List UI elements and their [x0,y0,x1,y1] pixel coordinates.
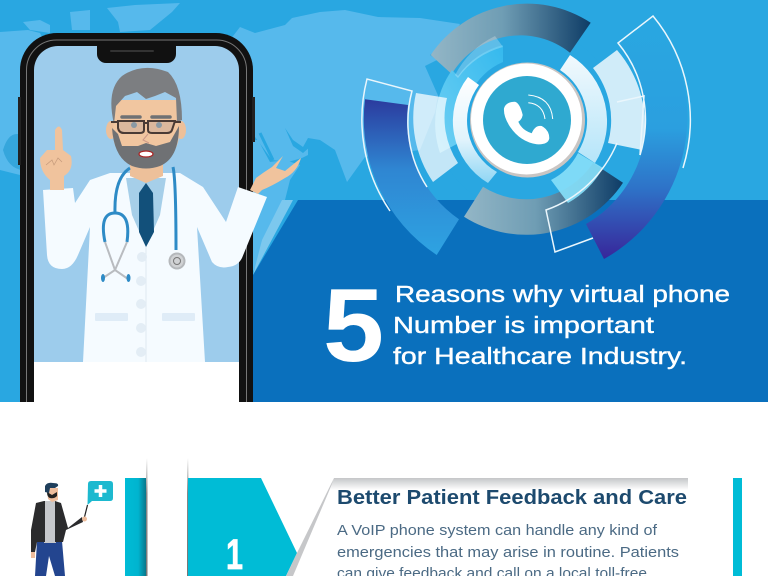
top grey-blue arc [431,4,591,74]
gulf and red sea [285,128,311,153]
white coat and sleeves [43,173,267,362]
right indigo arc [586,22,687,259]
sky disc behind ring [435,28,619,212]
mouth [139,151,153,157]
centre dial [470,62,585,178]
card body: A VoIP phone system can handle any kind of [337,522,658,539]
head [47,488,58,502]
radial phone graphic [362,4,690,259]
title text [393,281,730,369]
translucent white segments [413,50,645,183]
coat pockets [95,313,195,321]
phone screen [34,46,239,362]
card body: emergencies that may arise in routine. Patients [337,544,679,561]
card shadow [330,478,688,490]
white outlines [362,16,690,252]
teal arrow shape [188,478,297,576]
hand [82,516,87,522]
open hand [250,156,301,194]
doctor illustration [40,68,301,362]
torso shirt [44,501,56,543]
light cyan ring piece top-left [435,45,503,153]
neck [130,160,163,183]
title number: 5 [323,268,384,384]
jacket [31,501,83,552]
speech bubble plus [88,481,113,505]
beard [112,126,179,168]
shirt [126,178,166,247]
card body [337,522,679,576]
white content area [0,402,768,576]
world map [0,3,460,272]
notch [97,42,176,63]
icon: phone handset [504,95,553,144]
left blue arc [364,99,459,255]
ears [106,121,116,139]
legs [35,541,65,576]
translucent overlay on top arc [455,36,503,78]
stethoscope [101,167,184,282]
white fold [147,458,188,576]
raised hand [40,126,72,190]
card: better patient feedback [286,478,688,576]
header background [0,0,768,402]
title text: for Healthcare Industry. [393,343,687,369]
eyebrows [122,115,170,119]
coat buttons [136,252,147,357]
hair [111,68,182,124]
light cyan ring piece lower-right [551,153,603,203]
right teal stripe [733,478,742,576]
title text: Reasons why virtual phone [395,281,730,307]
teal stripe left [125,478,147,576]
title text: Number is important [393,312,655,338]
card heading: Better Patient Feedback and Care [337,487,687,509]
blue title panel [253,200,768,402]
step 1 banner [125,458,297,576]
glasses [111,121,181,133]
bottom grey-blue arc [464,163,623,235]
face [113,100,179,165]
phone frame [18,33,255,403]
person with plus sign icon [31,481,113,576]
tie [139,183,154,247]
